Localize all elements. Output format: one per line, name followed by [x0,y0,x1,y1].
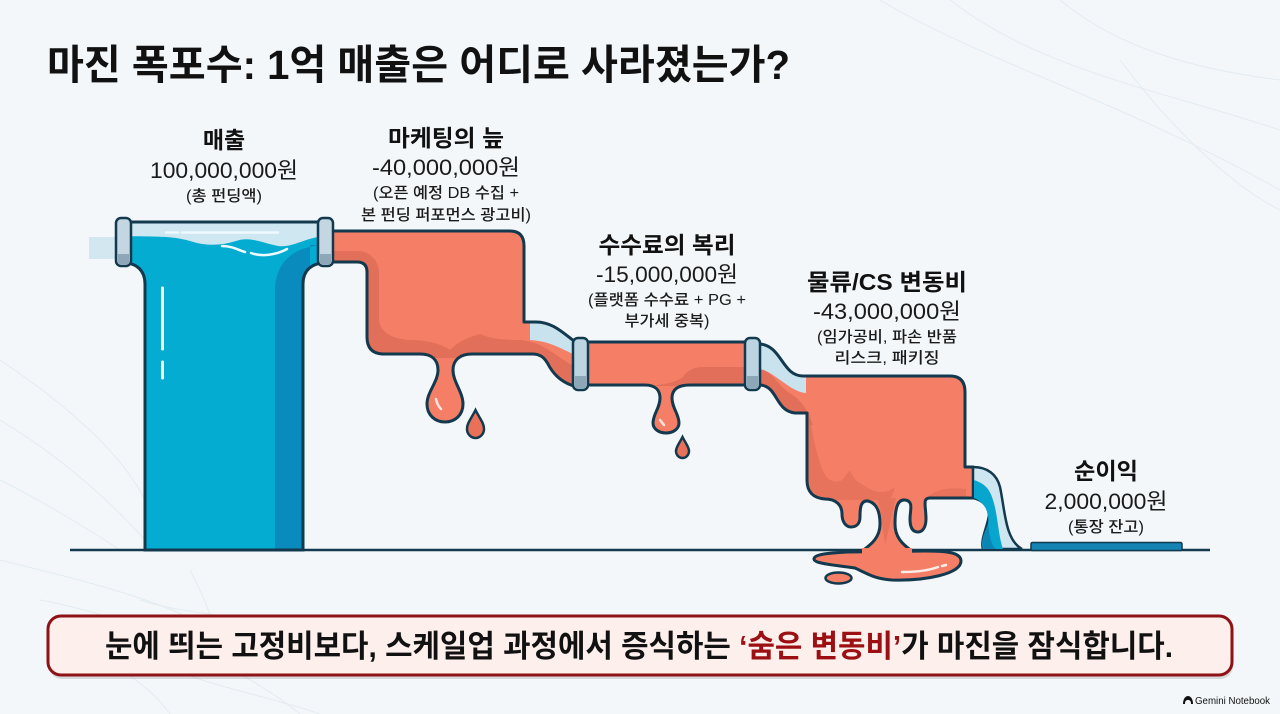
ground line [70,549,1210,551]
outlet light stream [973,467,1022,549]
shading under pipe [761,369,813,425]
water highlights [162,232,287,378]
title: 마진 폭포수: 1억 매출은 어디로 사라졌는가? [47,42,790,88]
swamp shading [800,412,966,500]
falling drop [676,437,689,458]
panel: net profit outflow [973,467,1182,550]
panel: revenue tank [89,222,325,550]
icon: gemini logo [1183,696,1193,704]
central flow streak [878,498,896,545]
label: marketing [361,125,531,224]
panel: logistics swamp [760,344,974,584]
tank outline [124,222,325,550]
puddle drop [826,572,852,584]
label: fees [588,232,746,330]
swamp outline [333,231,574,422]
tank body [124,222,325,550]
flange: tank left [116,218,131,266]
label: logistics: 리스크, 패키징 [834,349,940,367]
label: marketing: 본 펀딩 퍼포먼스 광고비) [361,206,531,224]
label: revenue: 100,000,000원 [150,158,298,183]
label: fees: -15,000,000원 [596,262,738,287]
drip highlight [436,399,441,409]
drip highlight [660,420,664,425]
pipe body [582,342,752,433]
label: fees: 부가세 중복) [624,312,710,330]
light pipe section [760,345,806,393]
label: net profit [1044,458,1168,536]
label: net profit: 2,000,000원 [1044,489,1168,514]
outlet blue stream [974,480,1003,549]
swamp body [760,344,974,551]
label: revenue: (총 펀딩액) [186,187,262,205]
air gap [125,223,324,246]
outlet dark stream [983,524,996,549]
swamp outline [760,344,974,551]
label: logistics: -43,000,000원 [813,299,961,324]
label: marketing: (오픈 예정 DB 수집 + [373,184,519,202]
flow junction patch [862,548,912,555]
label: fees: (플랫폼 수수료 + PG + [588,291,746,309]
flange: tank right [318,218,333,266]
callout banner: 눈에 띄는 고정비보다, 스케일업 과정에서 증식하는 ‘숨은 변동비’가 마진을 잠식합니다. [105,629,1173,664]
label: marketing: 마케팅의 늪 [388,125,504,151]
label: logistics: 물류/CS 변동비 [807,269,967,295]
flange: fee left [573,338,588,390]
label: logistics: (임가공비, 파손 반품 [817,328,957,346]
light pipe section [530,323,573,354]
watermark: Gemini Notebook [1195,695,1271,707]
tank shading [275,245,317,548]
inlet ghost pipe [89,237,117,259]
panel: marketing swamp [333,231,574,438]
label: fees: 수수료의 복리 [598,232,736,258]
label: revenue: 매출 [203,127,245,153]
pipe outline [582,342,752,433]
callout banner [48,616,1233,679]
label: marketing: -40,000,000원 [372,155,520,180]
pipe flanges [116,218,760,390]
swamp body [333,231,574,422]
label: logistics [807,269,967,367]
label: net profit: 순이익 [1074,458,1138,484]
panel: fee pipe [582,342,752,458]
label: net profit: (통장 잔고) [1068,518,1144,536]
swamp shading [333,251,574,390]
puddle highlight [902,565,946,572]
flange: fee right [745,338,760,390]
label: revenue [150,127,298,205]
puddle [814,551,961,580]
falling drop [467,410,484,438]
pipe shading [655,367,744,386]
profit bar [1031,542,1182,550]
